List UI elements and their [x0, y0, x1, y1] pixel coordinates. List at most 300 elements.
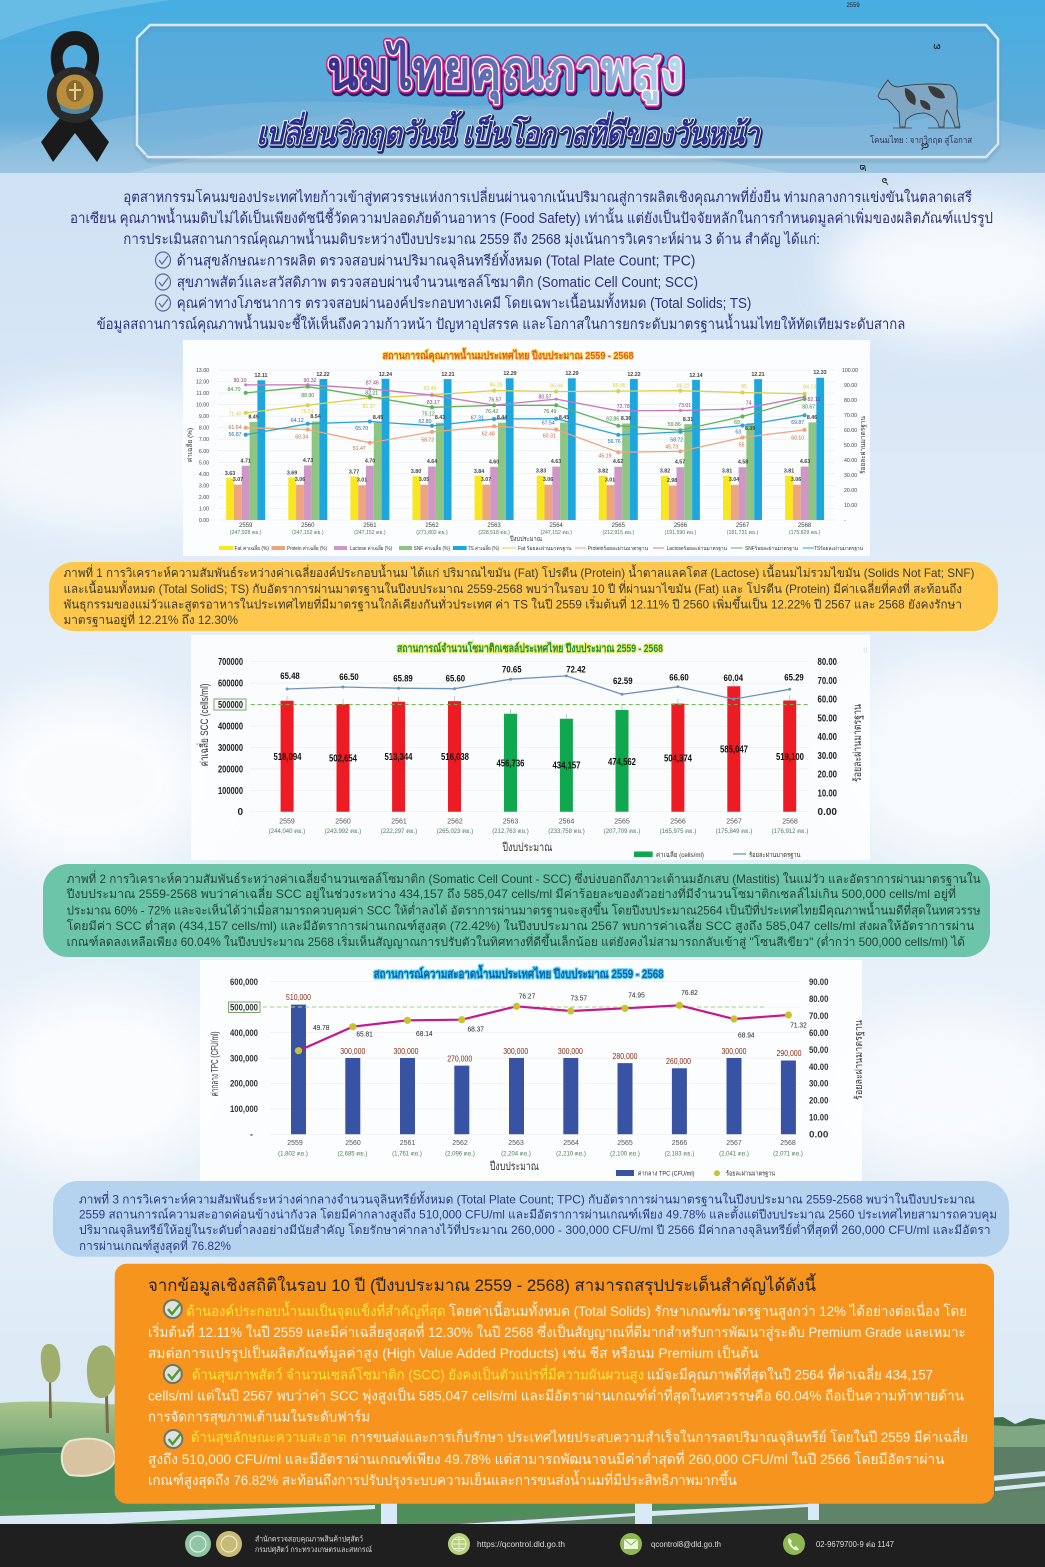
conclusions: body text: สมต่อการแปรรูปเป็นผลิตภัณฑ์มูลค่าสูง (High Value Added Products) เช่น ชีส หรือนม Premium เป็นต้น	[148, 1344, 759, 1362]
right axis labels: -	[844, 518, 846, 524]
bar value labels	[274, 744, 804, 772]
bar value labels: 456,736	[496, 758, 525, 770]
left axis labels: 100000	[218, 786, 243, 797]
email address: qcontrol8@dld.go.th	[651, 1540, 721, 1549]
axis titles	[210, 1020, 865, 1173]
year labels: 2567	[726, 818, 742, 826]
bar value labels: 4.71	[241, 458, 251, 464]
phone number: 02-9679700-9 ต่อ 1147	[816, 1540, 895, 1549]
year labels: 2562	[452, 1140, 468, 1147]
right axis labels: 0.00	[809, 1130, 828, 1140]
left axis labels: 7.00	[199, 437, 209, 443]
bar value labels: 8.49	[248, 414, 259, 420]
legend	[616, 1170, 775, 1178]
fat rate labels: 85	[741, 384, 747, 390]
axis titles: ปีงบประมาณ	[510, 535, 542, 543]
year labels	[279, 818, 798, 826]
conclusions: body text: สูงถึง 510,000 CFU/ml และมีอัตราผ่านเกณฑ์เพียง 49.78% แต่สามารถพัฒนาจนมีค่าต่ำสุดที่ 260,000 CFU/ml ในปี 2566 โดยมีอัตราผ่าน	[148, 1450, 945, 1468]
callout: figure 2 explanation	[43, 864, 990, 957]
sample size labels: (212,915 ตย.)	[603, 530, 634, 536]
SNF rate labels: 82.21	[365, 391, 378, 397]
bar value labels: 4.63	[800, 459, 810, 465]
bar value labels: 12.14	[689, 373, 703, 379]
TS rate labels: 67.31	[471, 416, 484, 422]
bar value labels: 12.21	[441, 372, 455, 378]
bar value labels: 12.29	[503, 371, 517, 377]
bar value labels: 3.63	[225, 471, 235, 477]
year labels: 2565	[617, 1140, 633, 1147]
right axis labels: 90.00	[844, 383, 857, 389]
stray page numerals: ๘	[921, 140, 929, 152]
bar value labels: 3.81	[722, 468, 732, 474]
bar value labels: 12.22	[316, 372, 330, 378]
gridlines	[270, 982, 800, 1134]
stray page numerals	[846, 3, 941, 653]
TS rate labels: 56.87	[229, 432, 242, 438]
TPC value labels: 300,000	[340, 1046, 366, 1056]
bars: green below threshold	[504, 710, 628, 812]
500000 threshold box	[214, 699, 246, 710]
protein rate labels: 51.47	[353, 446, 366, 452]
icon: check badge 1	[164, 1300, 182, 1318]
conclusions: highlighted phrases: ด้านองค์ประกอบน้ำนมเป็นจุดแข็งที่สำคัญที่สุด	[186, 1301, 446, 1320]
right axis labels	[842, 368, 858, 524]
bar value labels: 8.45	[373, 415, 383, 421]
bar value labels: 4.64	[427, 459, 437, 465]
lactose rate labels: 80.57	[539, 395, 552, 401]
TPC value labels: 280,000	[612, 1051, 638, 1061]
sample size labels: (1,802 ตย.)	[278, 1152, 308, 1158]
right axis labels: 100.00	[842, 368, 858, 374]
lactose rate labels: 87.46	[366, 380, 379, 386]
SNF rate labels: 76.42	[485, 409, 498, 415]
intro text block: การประเมินสถานการณ์คุณภาพน้ำนมดิบระหว่างปีงบประมาณ 2559 ถึง 2568 มุ่งเน้นการวิเคราะห์ผ่าน 3 ด้าน สำคัญ ได้แก่:	[123, 228, 820, 248]
right axis labels: 20.00	[809, 1096, 828, 1106]
bar value labels: 3.82	[660, 468, 670, 474]
bars: SNF	[250, 422, 816, 520]
fat rate labels: 83.46	[424, 386, 437, 392]
lower road	[0, 1500, 1045, 1524]
pass rate labels: 65.89	[393, 674, 413, 684]
legend: SNF ค่าเฉลี่ย (%)	[414, 545, 450, 552]
year labels: 2564	[563, 1140, 579, 1147]
callout: figure 1 explanation: และเนื้อนมทั้งหมด (Total SolidS; TS) กับอัตราการผ่านมาตรฐานในปีงบประมาณ 2559-2568 พบว่าในรอบ 10 ปี ที่ผ่านมาไขมัน (Fat) และ โปรตีน (Protein) มีค่าเฉลี่ยที่คงที่ สะท้อนถึง	[64, 580, 962, 596]
right axis labels: 80.00	[809, 994, 828, 1004]
fat rate labels: 84.13	[803, 385, 816, 391]
lactose rate labels: 72.78	[617, 404, 630, 410]
right axis labels: 60.00	[809, 1028, 828, 1038]
protein rate labels: 61.54	[229, 425, 242, 431]
conclusions: body text: cells/ml แต่ในปี 2567 พบว่าค่า SCC พุ่งสูงเป็น 585,047 cells/ml และมีอัตราผ่านเกณฑ์ต่ำที่สุดในทศวรรษคือ 60.04% ถือเป็นความท้าทายด้าน	[148, 1386, 964, 1404]
year labels: 2562	[425, 523, 439, 529]
right axis labels: 20.00	[844, 488, 857, 494]
stray page numerals: =	[859, 647, 870, 653]
legend: Proteinร้อยละผ่านมาตรฐาน	[588, 545, 648, 552]
year labels	[287, 1140, 796, 1147]
legend: Lactose ค่าเฉลี่ย (%)	[350, 545, 392, 552]
right axis labels: 40.00	[818, 732, 837, 743]
callout: figure 3 explanation: การผ่านเกณฑ์สูงสุดที่ 76.82%	[79, 1237, 231, 1254]
callout: figure 3 explanation: 2559 สถานการณ์ความสะอาดค่อนข้างน่ากังวล โดยมีค่ากลางสูงถึง 510,000 CFU/ml และมีอัตราการผ่านเกณฑ์เพียง 49.78% และตั้งแต่ปีงบประมาณ 2560 ประเทศไทยสามารถควบคุม	[79, 1206, 997, 1222]
right axis labels: 50.00	[818, 714, 837, 724]
sample size labels: (2,204 ตย.)	[501, 1152, 531, 1158]
left axis labels: 500,000	[230, 1002, 258, 1012]
protein rate labels: 55	[739, 442, 745, 448]
year labels: 2566	[670, 818, 686, 826]
TS rate labels: 63	[735, 429, 741, 435]
conclusions: body text: โดยค่าเนื้อนมทั้งหมด (Total Solids) รักษาเกณฑ์มาตรฐานสูงกว่า 12% ได้อย่างต่อเนื่อง โดย	[449, 1301, 967, 1320]
axis titles: ร้อยละผ่านมาตรฐาน	[853, 1020, 865, 1100]
year labels: 2567	[736, 523, 750, 529]
callout: figure 1 explanation: ภาพที่ 1 การวิเคราะห์ความสัมพันธ์ระหว่างค่าเฉลี่ยองค์ประกอบน้ำนม ได้แก่ ปริมาณไขมัน (Fat) โปรตีน (Protein) น้ำตาลแลคโตส (Lactose) เนื้อนมไม่รวมไขมัน (Solids Not Fat; SNF)	[64, 564, 974, 580]
title: นมไทยคุณภาพสูง	[327, 39, 683, 105]
SNF rate labels: 75.12	[422, 411, 435, 417]
left axis labels	[196, 368, 209, 524]
sample size labels: (2,100 ตย.)	[610, 1152, 640, 1158]
axis titles: ค่าเฉลี่ย SCC (cells/ml)	[196, 684, 211, 766]
year labels: 2560	[301, 523, 315, 529]
right axis labels	[809, 977, 828, 1140]
icon: check bullets	[156, 252, 170, 311]
year labels: 2560	[335, 818, 351, 826]
left axis labels: -	[250, 1130, 253, 1140]
year labels: 2559	[239, 523, 253, 529]
year labels: 2568	[798, 523, 812, 529]
right axis labels: 50.00	[844, 443, 857, 449]
hay bale	[62, 1439, 115, 1476]
callout: figure 3 explanation: ภาพที่ 3 การวิเคราะห์ความสัมพันธ์ระหว่างค่ากลางจำนวนจุลินทรีย์ทั้งหมด (Total Plate Count; TPC) กับอัตราการผ่านมาตรฐานในปีงบประมาณ 2559-2568 พบว่าในปีงบประมาณ	[79, 1190, 975, 1208]
pass rate labels: 68.14	[416, 1029, 433, 1038]
TS rate labels: 58.72	[670, 437, 683, 443]
gridlines	[250, 662, 808, 812]
bar value labels: 474,562	[608, 757, 636, 768]
pass rate labels: 68.37	[467, 1024, 484, 1034]
bar value labels: 8.54	[310, 414, 321, 420]
right axis labels: 10.00	[809, 1113, 828, 1123]
right axis labels: 10.00	[818, 788, 837, 800]
sample size labels: (165,975 ตย.)	[660, 829, 696, 835]
sample size labels: (1,761 ตย.)	[392, 1152, 422, 1158]
left axis labels: 9.00	[199, 414, 209, 420]
right axis labels: 40.00	[809, 1062, 828, 1072]
protein rate labels: 60.34	[295, 435, 308, 441]
icon: cow	[878, 80, 960, 128]
sample size labels	[230, 530, 821, 536]
protein rate labels: 60.10	[791, 435, 804, 441]
sample size labels: (247,152 ตย.)	[292, 530, 324, 536]
left axis labels: 600000	[218, 679, 243, 690]
TS rate labels: 69.87	[791, 420, 804, 426]
icon: check badge 2	[164, 1365, 182, 1383]
conclusions: highlighted phrases: ด้านสุขลักษณะความสะอาด	[191, 1429, 346, 1446]
fat rate labels: 81.37	[363, 404, 376, 410]
left axis labels: 600,000	[230, 977, 258, 987]
protein rate labels	[229, 425, 804, 460]
fat rate labels: 85.66	[550, 384, 563, 390]
stray page numerals: 2559	[846, 3, 860, 9]
year labels: 2564	[559, 818, 574, 826]
pass rate labels: 65.29	[784, 672, 804, 684]
TS rate labels: 65.70	[355, 426, 368, 432]
protein rate labels: 45.73	[665, 444, 678, 450]
pass rate labels: 76.82	[681, 988, 698, 997]
title: นมไทยคุณภาพสูง	[327, 39, 683, 105]
fat rate labels: 71.40	[229, 411, 242, 417]
year labels: 2560	[345, 1140, 361, 1147]
icon: website	[448, 1533, 470, 1555]
conclusions: body text: เกณฑ์สูงสุดถึง 76.82% สะท้อนถึงการปรับปรุงระบบความเย็นและการขนส่งน้ำนมที่มีประสิทธิภาพมากขึ้น	[148, 1470, 737, 1489]
axis titles	[196, 684, 864, 854]
bars: TS	[257, 378, 824, 520]
right axis labels: 70.00	[818, 676, 837, 687]
sample size labels: (176,912 ตย.)	[772, 829, 808, 835]
pass rate labels: 76.27	[519, 992, 535, 1000]
chart title: สถานการณ์จำนวนโซมาติกเซลล์ประเทศไทย ปีงบประมาณ 2559 - 2568	[397, 641, 663, 655]
bar value labels: 518,094	[274, 752, 302, 763]
sample size labels: (175,849 ตย.)	[716, 829, 752, 835]
chart title: สถานการณ์จำนวนโซมาติกเซลล์ประเทศไทย ปีงบประมาณ 2559 - 2568	[397, 641, 663, 655]
conclusions: body text	[148, 1301, 968, 1489]
TPC value labels: 300,000	[558, 1046, 583, 1056]
axis titles	[185, 415, 867, 543]
bar value labels: 4.58	[738, 460, 748, 466]
sample size labels: (2,210 ตย.)	[556, 1152, 586, 1158]
sample size labels: (247,152 ตย.)	[354, 530, 386, 536]
lactose rate labels: 82.12	[808, 397, 821, 403]
legend	[219, 545, 863, 552]
callout: figure 2 explanation: ปีงบประมาณ 2559-2568 พบว่าค่าเฉลี่ย SCC อยู่ในช่วงระหว่าง 434,157 ถึง 585,047 cells/ml มีค่าร้อยละของตัวอย่างที่มีจำนวนโซมาติกเซลล์ไม่เกิน 500,000 cells/ml อยู่ที่	[66, 885, 956, 902]
sample size labels: (181,731 ตย.)	[727, 530, 759, 536]
pass rate labels: 62.59	[613, 676, 633, 687]
left axis labels	[230, 977, 258, 1140]
legend: TSร้อยละผ่านมาตรฐาน	[814, 545, 863, 552]
right axis labels: 10.00	[844, 503, 857, 509]
bar value labels: 3.01	[605, 478, 615, 484]
bar value labels: 3.69	[287, 470, 297, 476]
callout: figure 1 explanation: มาตรฐานอยู่ที่ 12.21% ถึง 12.30%	[64, 611, 238, 628]
callout: figure 3 explanation	[53, 1181, 1009, 1257]
bar value labels: 3.06	[543, 477, 553, 483]
fat rate labels	[229, 382, 816, 417]
left axis labels	[218, 657, 243, 818]
pass rate markers	[295, 1002, 792, 1054]
pass rate labels: 70.65	[502, 664, 522, 676]
year labels: 2559	[287, 1140, 303, 1147]
bars: fat	[226, 476, 793, 520]
lactose rate labels	[234, 378, 821, 410]
year labels: 2567	[726, 1140, 742, 1147]
protein rate labels: 45.19	[599, 454, 612, 460]
right axis labels: 30.00	[844, 473, 857, 479]
gridlines	[218, 370, 835, 520]
sample size labels: (2,071 ตย.)	[773, 1152, 803, 1158]
left axis labels: 0.00	[199, 518, 209, 524]
bar value labels: 4.60	[489, 460, 499, 466]
chart title	[397, 641, 663, 655]
intro text block	[70, 187, 993, 333]
bar value labels: 12.33	[813, 370, 827, 376]
left axis labels: 2.00	[199, 495, 209, 501]
line: SNF pass rate	[246, 387, 805, 430]
left axis labels: 200,000	[230, 1079, 258, 1089]
bar value labels: 8.31	[683, 417, 693, 423]
error bars	[287, 681, 790, 719]
axis titles: ปีงบประมาณ	[502, 841, 553, 854]
pass rate labels: 65.48	[280, 671, 300, 682]
lactose rate labels: 90.32	[304, 378, 317, 384]
year labels: 2561	[391, 818, 407, 826]
year labels: 2566	[672, 1140, 687, 1147]
bar value labels: 3.77	[349, 470, 359, 476]
pass rate line	[298, 1005, 788, 1051]
left field	[0, 1402, 130, 1524]
sample size labels: (247,152 ตย.)	[540, 530, 572, 536]
bar value labels: 12.11	[255, 373, 268, 379]
right axis labels: 20.00	[818, 770, 837, 781]
bar value labels: 3.07	[481, 477, 491, 483]
fat rate labels: 76.51	[301, 409, 314, 415]
lactose rate labels: 73.01	[678, 403, 691, 409]
conclusions: body text: แม้จะมีคุณภาพดีที่สุดในปี 2564 ที่ค่าเฉลี่ย 434,157	[647, 1366, 933, 1384]
pass rate labels: 60.04	[724, 673, 744, 684]
pass rate line	[287, 676, 790, 699]
intro text block: ด้านสุขลักษณะการผลิต ตรวจสอบผ่านปริมาณจุลินทรีย์ทั้งหมด (Total Plate Count; TPC)	[177, 250, 695, 270]
lactose rate labels: 83.17	[427, 400, 440, 406]
left axis labels: 500000	[218, 700, 243, 711]
line: protein pass rate	[246, 426, 805, 452]
axis titles: ค่ากลาง TPC (CFU/ml)	[210, 1032, 221, 1096]
right axis labels: 0.00	[818, 807, 837, 818]
title: นมไทยคุณภาพสูง	[328, 41, 684, 107]
chart title: สถานการณ์คุณภาพน้ำนมประเทศไทย ปีงบประมาณ 2559 - 2568	[382, 347, 634, 363]
stray page numerals: ๖	[881, 175, 888, 187]
lactose rate labels: 90.10	[234, 378, 247, 384]
bar value labels: 513,344	[384, 752, 413, 763]
cow caption: โคนมไทย : จากวิกฤต สู่โอกาส	[870, 135, 972, 146]
sample size labels: (2,041 ตย.)	[719, 1152, 749, 1158]
left axis labels: 3.00	[199, 483, 209, 489]
bar value labels: 8.36	[621, 416, 631, 422]
bar value labels: 3.07	[233, 477, 243, 483]
TPC value labels: 300,000	[722, 1046, 747, 1056]
year labels: 2562	[447, 818, 463, 826]
conclusions: body text: การขนส่งและการเก็บรักษา ประเทศไทยประสบความสำเร็จในการลดปริมาณจุลินทรีย์ โดยในปี 2559 มีค่าเฉลี่ย	[351, 1428, 968, 1446]
chart title: สถานการณ์คุณภาพน้ำนมประเทศไทย ปีงบประมาณ 2559 - 2568	[382, 347, 634, 363]
bars: lactose	[242, 465, 809, 520]
pass rate labels: 65.81	[356, 1030, 373, 1038]
right axis labels: 30.00	[818, 751, 837, 762]
500,000 threshold box	[229, 1002, 260, 1012]
bar value labels: 12.29	[565, 371, 579, 377]
TS rate labels: 67.54	[542, 421, 555, 427]
bar value labels: 12.21	[751, 372, 765, 378]
sample size labels: (2,183 ตย.)	[665, 1152, 694, 1158]
SNF rate labels: 59.86	[668, 422, 681, 428]
bars: TPC	[291, 1005, 796, 1134]
sample size labels: (2,685 ตย.)	[338, 1152, 367, 1158]
sample size labels	[278, 1152, 803, 1158]
TPC value labels: 300,000	[394, 1046, 419, 1056]
chart title: สถานการณ์ความสะอาดน้ำนมประเทศไทย ปีงบประมาณ 2559 - 2568	[374, 964, 664, 981]
pass rate labels: 73.57	[571, 994, 587, 1002]
TS rate labels: 64.12	[291, 418, 304, 424]
SNF rate labels: 88.90	[301, 393, 314, 399]
callout: figure 3 explanation: ปริมาณจุลินทรีย์ให้อยู่ในระดับต่ำลงอย่างมีนัยสำคัญ โดยรักษาค่ากลางไว้ที่ประมาณ 260,000 - 300,000 CFU/ml ปี 2566 มีค่ากลางจุลินทรีย์ต่ำที่สุดที่ 260,000 CFU/ml และมีอัตรา	[79, 1221, 991, 1238]
bar value labels: 4.70	[365, 458, 375, 464]
legend: Fat ร้อยละผ่านมาตรฐาน	[518, 545, 572, 552]
conclusions: highlighted phrases: ด้านสุขภาพสัตว์ จำนวนเซลล์โซมาติก (SCC) ยังคงเป็นตัวแปรที่มีความผันผวนสูง	[192, 1366, 644, 1384]
protein rate labels: 62.48	[482, 432, 495, 438]
left axis labels: 10.00	[196, 403, 209, 409]
TPC value labels: 510,000	[286, 992, 311, 1002]
pass rate labels: 66.50	[339, 672, 359, 683]
SNF rate labels: 84.70	[228, 387, 241, 393]
bar value labels: 8.39	[745, 426, 755, 432]
sample size labels: (191,590 ตย.)	[665, 530, 696, 536]
axis titles: ปีงบประมาณ	[489, 1160, 539, 1173]
sample size labels: (265,023 ตย.)	[437, 829, 473, 835]
department name	[255, 1534, 372, 1554]
icon: phone	[783, 1533, 805, 1555]
intro text block: ข้อมูลสถานการณ์คุณภาพน้ำนมจะชี้ให้เห็นถึงความก้าวหน้า ปัญหาอุปสรรค และโอกาสในการยกระดับมาตรฐานน้ำนมไทยให้ทัดเทียมระดับสากล	[97, 313, 905, 333]
bar value labels: 516,038	[441, 752, 469, 763]
left axis labels: 200000	[218, 764, 243, 775]
bar value labels: 3.83	[536, 468, 546, 474]
bar value labels: 8.44	[497, 415, 507, 421]
bar value labels: 8.46	[807, 415, 817, 421]
bar value labels: 4.62	[613, 459, 623, 465]
department name: กรมปศุสัตว์ กระทรวงเกษตรและสหกรณ์	[255, 1545, 372, 1554]
lactose rate labels: 76.57	[489, 397, 502, 403]
year labels: 2561	[400, 1140, 415, 1147]
lactose rate labels: 74	[746, 401, 752, 407]
header banner frame	[137, 25, 998, 161]
icon: check badge 3	[164, 1430, 182, 1448]
sample size labels: (233,758 ตย.)	[548, 829, 585, 835]
bar value labels: 504,374	[664, 754, 692, 764]
bar value labels: 3.81	[784, 468, 794, 474]
line: fat pass rate	[246, 391, 805, 413]
right axis labels: 70.00	[809, 1011, 828, 1021]
callout: figure 2 explanation: ประมาณ 60% - 72% และจะเห็นได้ว่าเมื่อสามารถควบคุมค่า SCC ให้ต่ำลงได้ อัตราการผ่านมาตรฐานจะสูงขึ้น โดยปีงบประมาณ2564 เป็นปีที่ประเทศไทยมีคุณภาพน้ำนมดีที่สุดในทศวรรษ	[67, 902, 981, 918]
bar value labels	[225, 370, 827, 484]
pass rate labels	[313, 988, 807, 1040]
subtitle: เปลี่ยนวิกฤตวันนี้ เป็นโอกาสที่ดีของวันหน้า	[258, 112, 762, 152]
axis titles: ค่าเฉลี่ย (%)	[185, 428, 194, 462]
left axis labels: 5.00	[199, 460, 209, 466]
conclusions: highlighted phrases	[186, 1301, 644, 1446]
chart title: สถานการณ์ความสะอาดน้ำนมประเทศไทย ปีงบประมาณ 2559 - 2568	[374, 964, 664, 981]
sample size labels: (243,992 ตย.)	[325, 829, 361, 835]
sample size labels: (247,928 ตย.)	[230, 530, 262, 536]
protein rate labels: 58.72	[421, 437, 434, 443]
pass rate labels: 74.95	[628, 990, 645, 1000]
mourning ribbon with emblem	[41, 31, 109, 162]
pass rate labels	[280, 664, 804, 687]
right axis labels: 40.00	[844, 458, 857, 464]
left axis labels: 100,000	[230, 1104, 258, 1114]
legend: ค่ากลาง TPC (CFU/ml)	[638, 1170, 694, 1178]
axis titles: ร้อยละผ่านมาตรฐาน	[852, 704, 864, 782]
stray page numerals: ๓	[933, 41, 941, 53]
left axis labels: 400,000	[230, 1028, 258, 1038]
panel: somatic cell count chart	[191, 635, 870, 860]
line: lactose pass rate	[246, 385, 805, 411]
website URL: https://qcontrol.dld.go.th	[477, 1540, 565, 1549]
sample size labels: (244,040 ตย.)	[269, 829, 305, 835]
legend: ร้อยละผ่านมาตรฐาน	[749, 851, 801, 859]
bar value labels: 585,047	[720, 744, 748, 756]
